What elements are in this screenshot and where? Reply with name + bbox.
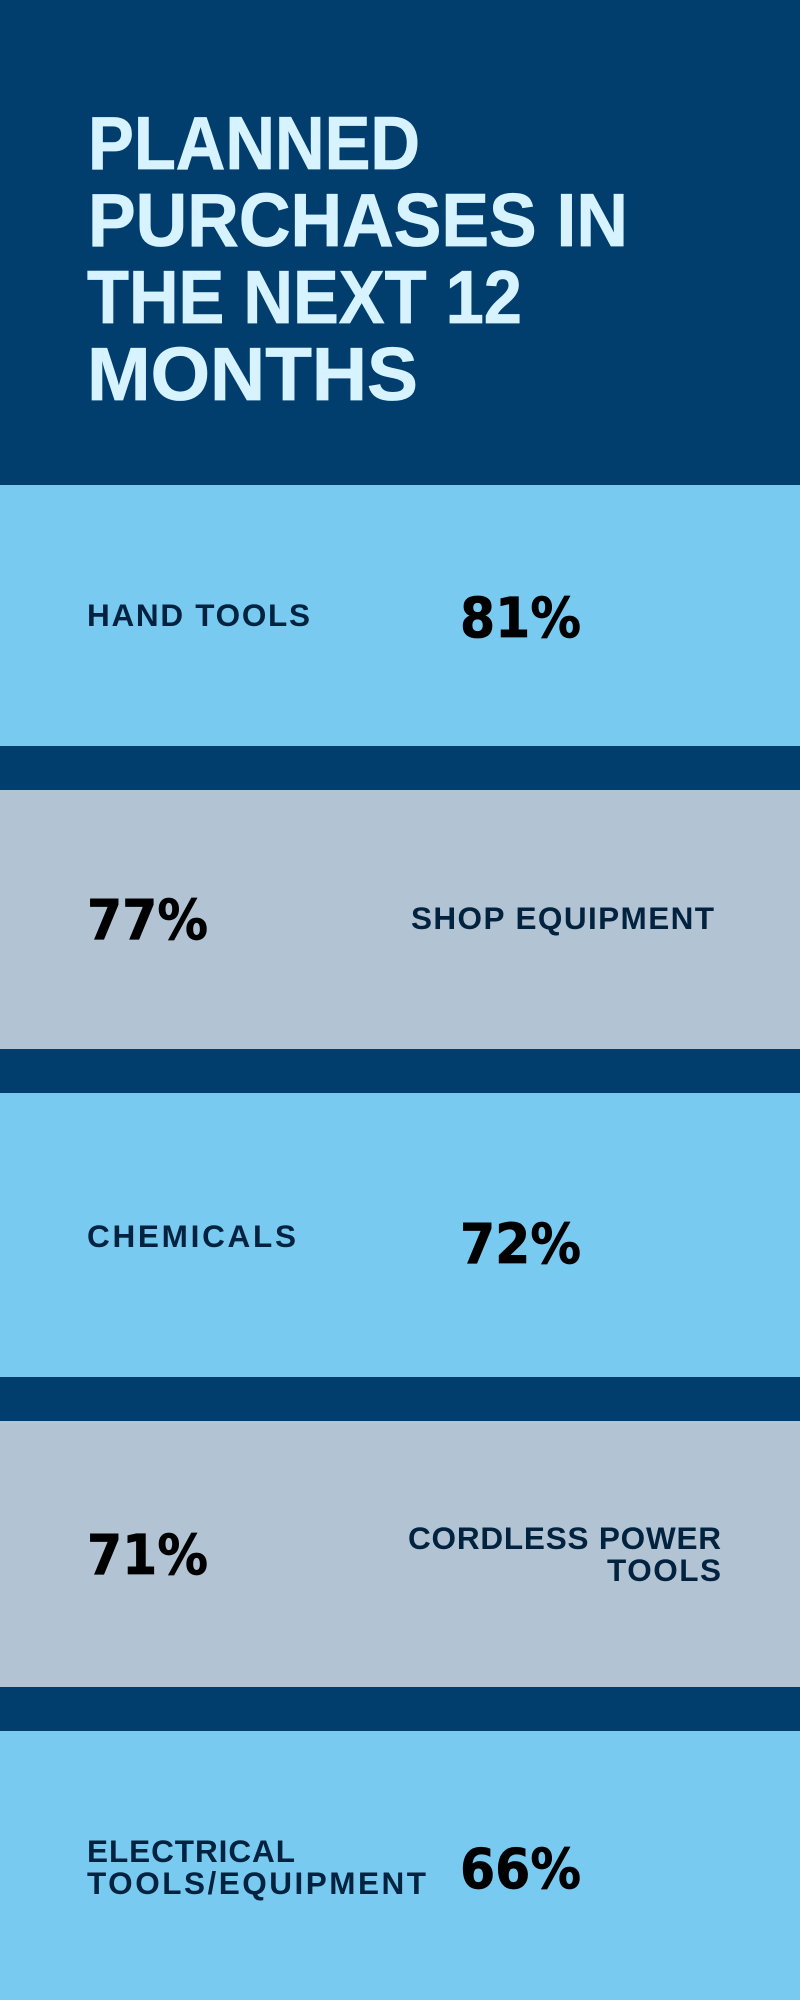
header panel	[0, 0, 800, 485]
label: cordless power tools: TOOLS	[607, 1552, 721, 1588]
value: 72%: 72%	[460, 1212, 581, 1276]
label: hand tools: HAND TOOLS	[87, 597, 310, 633]
value: 71%: 71%	[87, 1523, 208, 1587]
label: electrical tools/equipment: TOOLS/EQUIPMENT	[87, 1865, 426, 1901]
title: PLANNED	[88, 101, 420, 185]
label: shop equipment: SHOP EQUIPMENT	[411, 900, 714, 936]
title: PURCHASES IN	[88, 178, 628, 262]
title: THE NEXT 12	[87, 255, 522, 339]
label: electrical tools/equipment: ELECTRICAL	[87, 1833, 295, 1869]
panel: cordless power tools	[0, 1421, 800, 1687]
label: cordless power tools	[408, 1520, 721, 1588]
value: 77%: 77%	[87, 888, 208, 952]
panel: electrical tools/equipment	[0, 1731, 800, 2000]
panel: shop equipment	[0, 790, 800, 1049]
panel: hand tools	[0, 485, 800, 746]
label: chemicals: CHEMICALS	[87, 1218, 296, 1254]
panel: chemicals	[0, 1093, 800, 1377]
title	[87, 101, 628, 416]
value: 81%: 81%	[460, 586, 581, 650]
label: cordless power tools: CORDLESS POWER	[408, 1520, 721, 1556]
value: 66%: 66%	[460, 1837, 581, 1901]
title: MONTHS	[87, 332, 418, 416]
label: electrical tools/equipment	[87, 1833, 426, 1901]
